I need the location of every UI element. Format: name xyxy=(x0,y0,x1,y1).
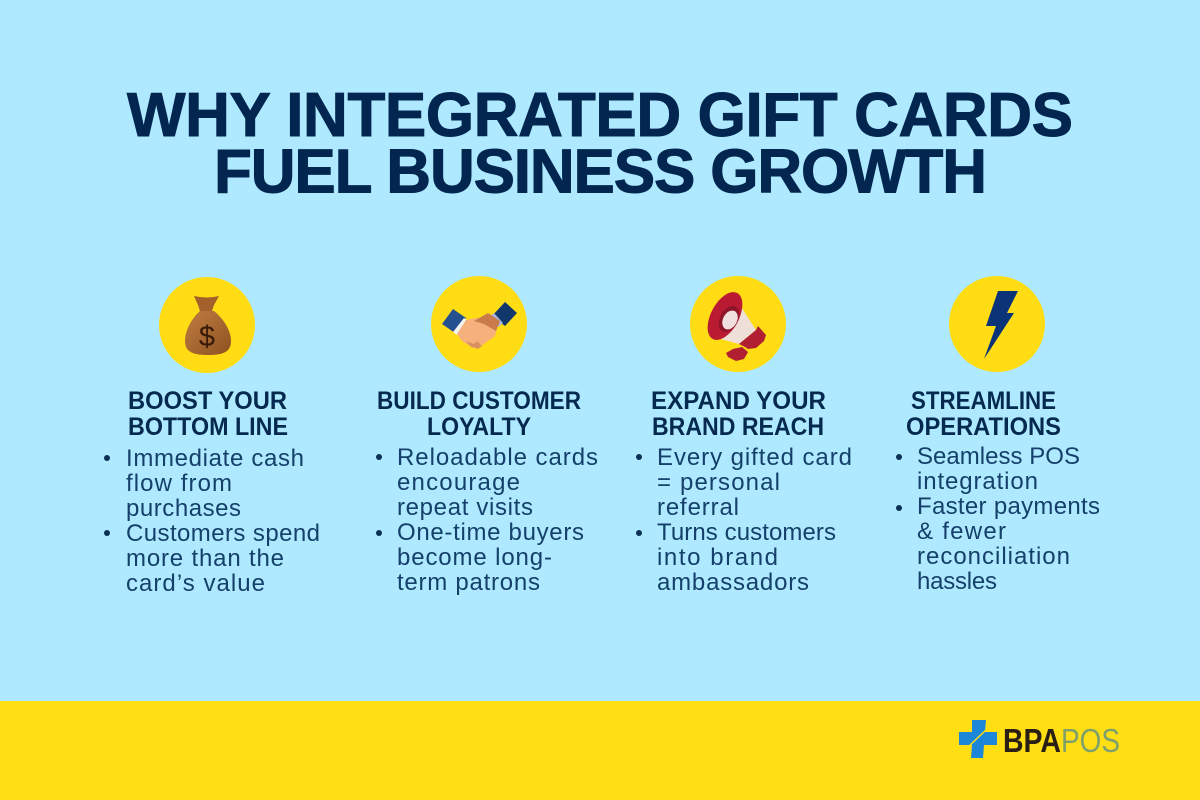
icon: money bag: $ xyxy=(199,321,215,353)
heading xyxy=(906,387,1061,441)
panel: build customer loyalty xyxy=(376,276,598,596)
title: FUEL BUSINESS GROWTH xyxy=(214,138,987,206)
icon: money bag xyxy=(159,277,255,373)
bullet list: flow from xyxy=(126,470,232,497)
logo: BPA POS xyxy=(959,720,1120,759)
title xyxy=(127,81,1073,206)
bullet list: term patrons xyxy=(397,569,540,596)
bullet list: = personal xyxy=(657,469,780,496)
bullet list: Reloadable cards xyxy=(397,444,598,471)
bullet list: purchases xyxy=(126,495,241,522)
heading: EXPAND YOUR xyxy=(651,387,826,415)
heading xyxy=(128,387,288,441)
bullet list xyxy=(896,443,1100,595)
logo: BPA POS: POS xyxy=(1061,722,1120,759)
panel: boost your bottom line xyxy=(104,277,320,597)
icon: handshake xyxy=(431,276,527,372)
heading: BOOST YOUR xyxy=(128,387,287,415)
panel: streamline operations xyxy=(896,276,1100,595)
bullet list: Faster payments xyxy=(917,493,1100,520)
bullet list: more than the xyxy=(126,545,284,572)
heading: BOTTOM LINE xyxy=(128,413,288,441)
bullet list: Every gifted card xyxy=(657,444,852,471)
logo: BPA POS: BPA xyxy=(1003,722,1061,759)
bullet list: reconciliation xyxy=(917,543,1070,570)
bullet list xyxy=(104,445,320,597)
icon: lightning bolt xyxy=(949,276,1045,372)
bullet list: Immediate cash xyxy=(126,445,304,472)
bullet list: Customers spend xyxy=(126,520,320,547)
bullet list: Turns customers xyxy=(657,519,836,546)
title: WHY INTEGRATED GIFT CARDS xyxy=(127,81,1073,150)
icon: megaphone xyxy=(690,276,786,372)
heading: OPERATIONS xyxy=(906,413,1061,441)
heading xyxy=(377,387,581,441)
bullet list xyxy=(636,444,852,596)
bullet list: One-time buyers xyxy=(397,519,584,546)
bullet list: become long- xyxy=(397,544,552,571)
bullet list: Seamless POS xyxy=(917,443,1080,470)
heading: STREAMLINE xyxy=(911,387,1056,415)
bullet list: integration xyxy=(917,468,1038,495)
bullet list: hassles xyxy=(917,568,997,595)
bullet list: encourage xyxy=(397,469,520,496)
heading: BRAND REACH xyxy=(652,413,824,441)
heading: LOYALTY xyxy=(427,413,531,441)
heading: BUILD CUSTOMER xyxy=(377,387,581,415)
bullet list: repeat visits xyxy=(397,494,533,521)
bullet list: & fewer xyxy=(917,518,1006,545)
heading xyxy=(651,387,826,441)
bullet list: ambassadors xyxy=(657,569,809,596)
bullet list: card’s value xyxy=(126,570,265,597)
bullet list xyxy=(376,444,598,596)
bullet list: referral xyxy=(657,494,739,521)
panel: expand your brand reach xyxy=(636,276,852,596)
footer band xyxy=(0,701,1200,800)
bullet list: into brand xyxy=(657,544,778,571)
